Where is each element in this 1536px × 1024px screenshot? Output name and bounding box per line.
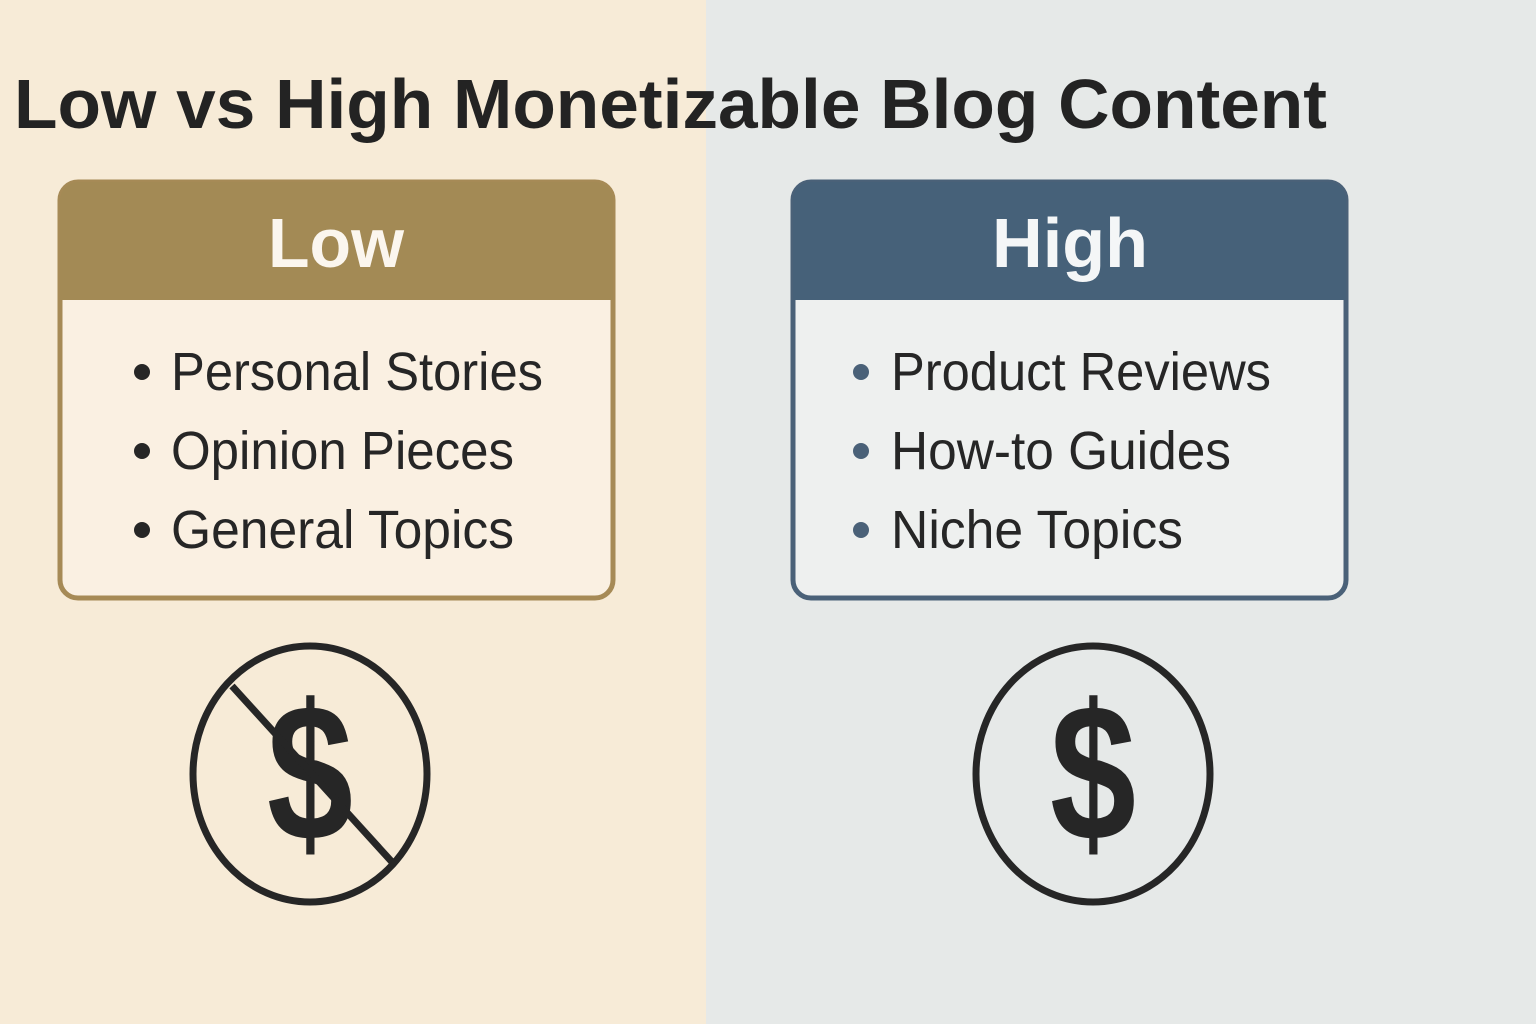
header: low bbox=[60, 182, 613, 300]
list: high items: How-to Guides bbox=[891, 421, 1231, 481]
header: high bbox=[793, 182, 1346, 300]
list: high items: Niche Topics bbox=[891, 500, 1183, 560]
header: low: Low bbox=[268, 204, 405, 282]
list: low items: Personal Stories bbox=[171, 342, 543, 402]
list: high items: Product Reviews bbox=[891, 342, 1271, 402]
icon: dollar bbox=[976, 646, 1210, 902]
list: low items: Opinion Pieces bbox=[171, 421, 514, 481]
icon: crossed-out dollar: $ bbox=[267, 664, 353, 882]
panel: high bbox=[793, 182, 1346, 598]
icon: dollar: $ bbox=[1050, 664, 1136, 882]
list: low items: General Topics bbox=[171, 500, 514, 560]
list: high items bbox=[853, 342, 1271, 560]
list: low items bbox=[134, 342, 543, 560]
icon: crossed-out dollar bbox=[193, 646, 427, 902]
panel: low bbox=[60, 182, 613, 598]
title: Low vs High Monetizable Blog Content bbox=[14, 65, 1327, 143]
header: high: High bbox=[992, 204, 1148, 282]
